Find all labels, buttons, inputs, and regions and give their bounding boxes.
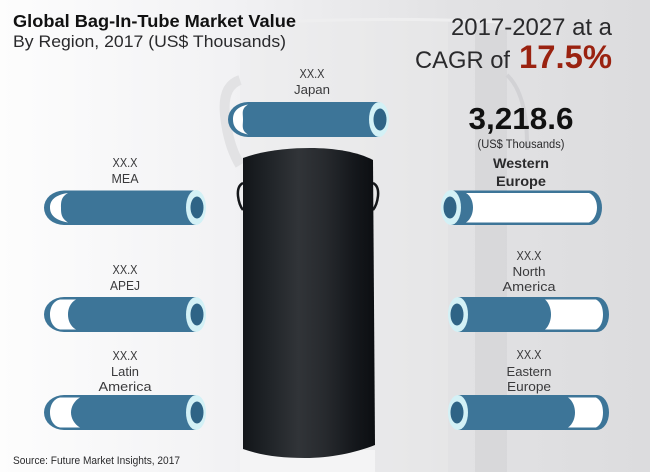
Latin America bar: America bbox=[98, 379, 152, 394]
title: By Region, 2017 (US$ Thousands) bbox=[13, 32, 286, 51]
CAGR callout: 2017-2027 at a bbox=[451, 14, 613, 41]
Latin America bar: Latin bbox=[111, 364, 139, 379]
source note: Source: Future Market Insights, 2017 bbox=[13, 455, 180, 467]
Japan bar: Japan bbox=[294, 82, 330, 97]
Western Europe value: 3,218.6 bbox=[468, 101, 574, 136]
MEA bar bbox=[44, 155, 206, 225]
Western Europe value: Western bbox=[493, 155, 549, 171]
North America bar bbox=[448, 248, 609, 332]
Japan bar: XX.X bbox=[300, 66, 325, 81]
CAGR callout bbox=[415, 14, 613, 75]
Western Europe value: (US$ Thousands) bbox=[478, 139, 565, 151]
title: Global Bag-In-Tube Market Value bbox=[13, 11, 296, 31]
Eastern Europe bar bbox=[448, 347, 609, 430]
Latin America bar bbox=[44, 348, 206, 430]
Latin America bar: XX.X bbox=[112, 348, 138, 363]
Eastern Europe bar: XX.X bbox=[516, 347, 542, 362]
Eastern Europe bar: Eastern bbox=[506, 364, 552, 379]
North America bar: North bbox=[512, 264, 546, 279]
MEA bar: XX.X bbox=[112, 155, 138, 170]
CAGR callout: CAGR of bbox=[415, 47, 510, 74]
product: black tube bbox=[238, 148, 378, 458]
Western Europe bar bbox=[441, 190, 602, 225]
North America bar: America bbox=[502, 279, 556, 294]
APEJ bar bbox=[44, 262, 206, 332]
Japan bar bbox=[228, 66, 389, 137]
APEJ bar: XX.X bbox=[112, 262, 138, 277]
Eastern Europe bar: Europe bbox=[507, 379, 551, 394]
title bbox=[13, 11, 296, 51]
CAGR callout: 17.5% bbox=[519, 39, 612, 75]
APEJ bar: APEJ bbox=[110, 278, 140, 293]
Western Europe value bbox=[468, 101, 574, 189]
MEA bar: MEA bbox=[112, 171, 139, 186]
North America bar: XX.X bbox=[516, 248, 542, 263]
Western Europe value: Europe bbox=[496, 173, 546, 189]
